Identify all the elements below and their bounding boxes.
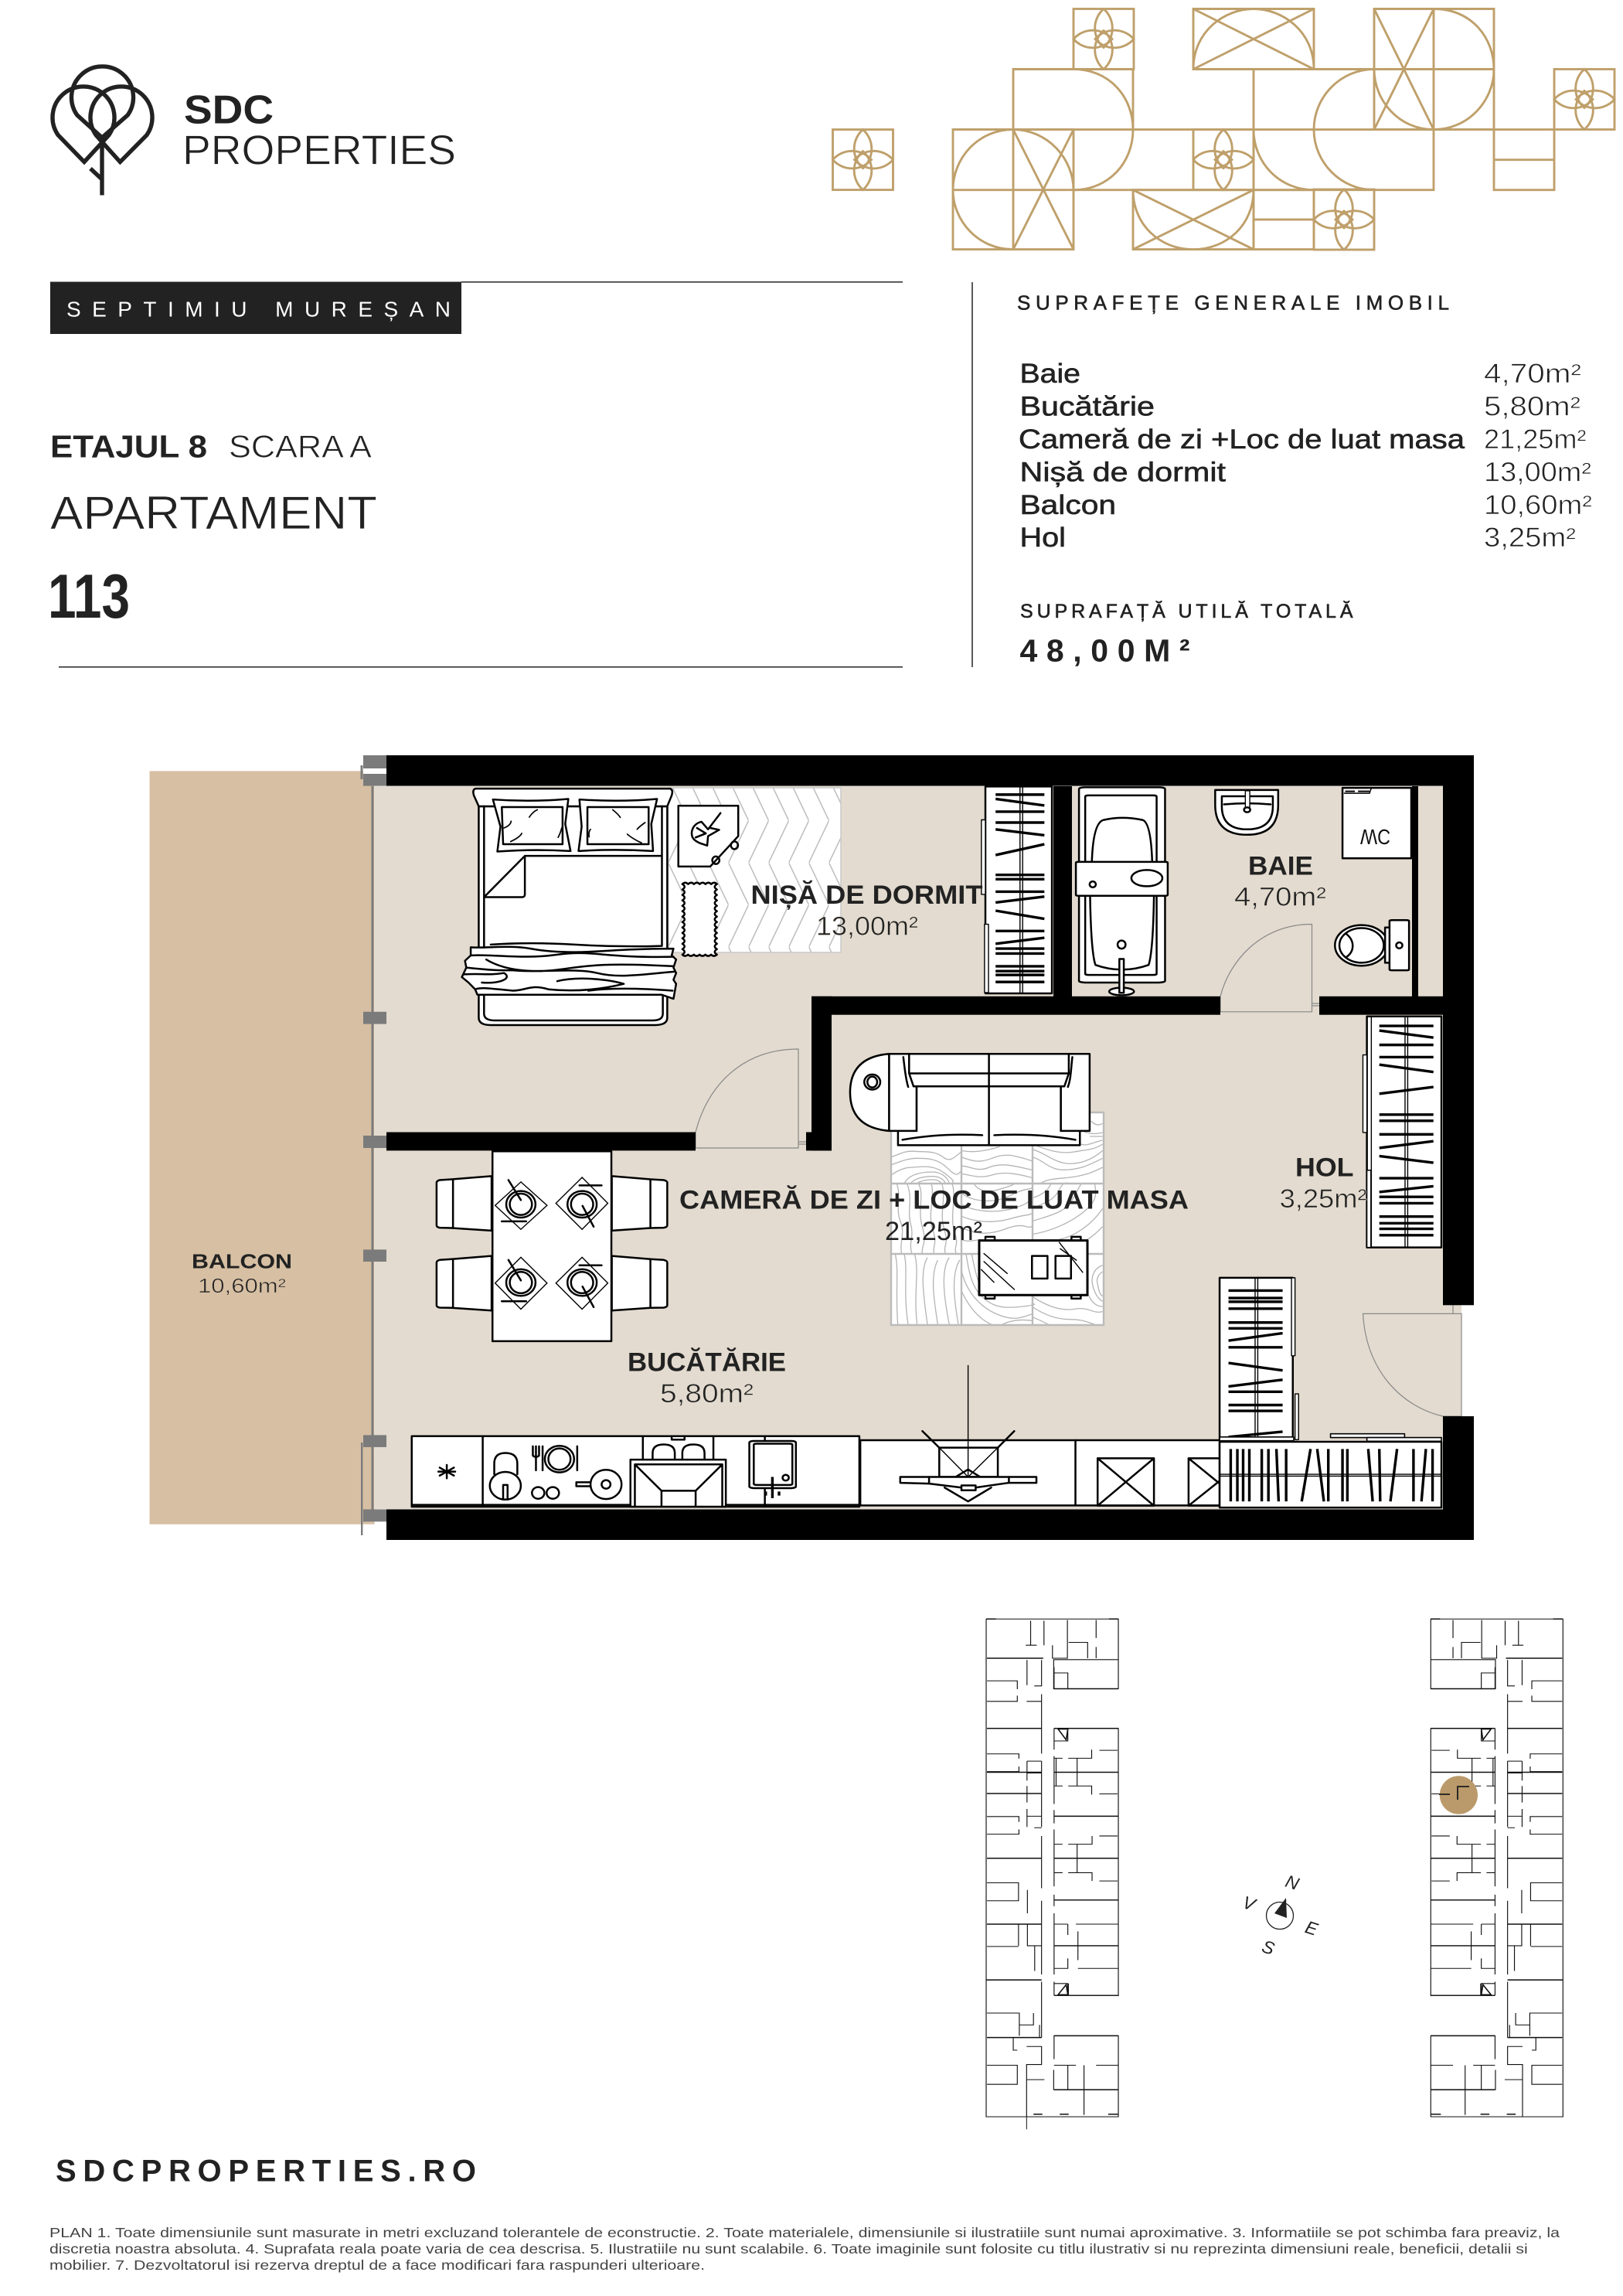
- header rule lines: [59, 281, 973, 668]
- label: sleeping niche: NIȘĂ DE DORMIT: [751, 881, 983, 910]
- icon: bedside mat: [682, 883, 717, 956]
- compass: S: [1260, 1936, 1278, 1959]
- label: bathroom: BAIE: [1248, 852, 1313, 881]
- label: balcony: [192, 1249, 292, 1297]
- compass: E: [1303, 1916, 1321, 1940]
- furniture: coffee table, tv unit, wardrobes: [860, 1156, 1441, 1507]
- room names and areas: [1019, 359, 1592, 553]
- compass: V: [1240, 1892, 1260, 1916]
- balcony glazing columns: [360, 755, 386, 1535]
- room names and areas: 21,25m²: [1484, 424, 1586, 455]
- floor plan: [150, 755, 1474, 1540]
- label: kitchen: [628, 1347, 786, 1409]
- icon: bottom wardrobe: [1220, 1442, 1441, 1507]
- label: balcony: BALCON: [192, 1249, 292, 1272]
- icon: hall wardrobe lower fittings: [1367, 1156, 1434, 1248]
- icon: dining table with chairs: [437, 1151, 667, 1341]
- label: mirrored WC mark: WC: [1360, 825, 1390, 849]
- decorative gold geometric pattern: [833, 9, 1614, 250]
- balcony area: [150, 771, 374, 1524]
- floor and scale heading: [50, 428, 373, 464]
- icon: hall wardrobe: [1363, 1017, 1441, 1248]
- label: bathroom: 4,70m²: [1234, 883, 1326, 912]
- total usable surface: SUPRAFAȚĂ UTILĂ TOTALĂ: [1020, 600, 1353, 622]
- room names and areas: Bucătărie: [1020, 391, 1155, 421]
- label: sleeping niche: 13,00m²: [816, 912, 918, 942]
- icon: kitchen sink: [750, 1441, 796, 1498]
- icon: toilet: [1335, 920, 1409, 970]
- icon: bathtub: [1076, 787, 1168, 995]
- website: SDCPROPERTIES.RO: [56, 2154, 476, 2188]
- icon: sofa with side table: [850, 1054, 1090, 1145]
- label: kitchen: BUCĂTĂRIE: [628, 1347, 786, 1377]
- label: living room: 21,25m²: [885, 1217, 982, 1246]
- label: living room: CAMERĂ DE ZI + LOC DE LUAT MASA: [679, 1186, 1189, 1215]
- apartment title: [48, 487, 377, 632]
- label: hall: HOL: [1295, 1153, 1354, 1182]
- legal disclaimer: discretia noastra absoluta. 4. Suprafata reala poate varia de cea descrisa. 5. Ilustratiile nu sunt scalabile. 6. Toate imaginile sunt folosite cu titlu ilustrativ si nu reprezinta dimensiuni reale, beneficii, detalii si: [49, 2241, 1528, 2257]
- walls: [386, 755, 1474, 1540]
- room names and areas: Baie: [1020, 359, 1080, 389]
- room names and areas: 4,70m²: [1484, 359, 1581, 389]
- icon: kitchen counter right with hob: [860, 1365, 1220, 1505]
- rug: herringbone: [669, 788, 841, 952]
- compass: N: [1283, 1871, 1301, 1894]
- room names and areas: 13,00m²: [1484, 457, 1591, 487]
- room names and areas: 3,25m²: [1484, 523, 1576, 553]
- compass: [1240, 1871, 1321, 1959]
- floor and scale heading: SCARA A: [229, 428, 373, 464]
- room names and areas: Hol: [1020, 523, 1066, 553]
- label: hall: [1280, 1153, 1367, 1214]
- marker: apartment position: [1440, 1776, 1478, 1814]
- total value: 48,00M²: [1020, 632, 1190, 668]
- icon: wardrobe niche: [982, 786, 1052, 993]
- logo wordmark SDC: SDC: [184, 88, 274, 133]
- doors: [696, 925, 1461, 1416]
- rug: wood grain: [891, 1112, 1104, 1325]
- apartment title: APARTAMENT: [50, 487, 377, 539]
- key plan: left building: [986, 1619, 1118, 2129]
- room names and areas: Cameră de zi +Loc de luat masa: [1019, 424, 1465, 455]
- furniture: wardrobe, bath, washbasin, toilet, sofa: [850, 786, 1441, 1248]
- icon: tree of three leaves: [53, 66, 152, 196]
- icon: bed: [462, 789, 676, 1025]
- label: balcony: 10,60m²: [198, 1274, 286, 1297]
- icon: washing machine box: [1342, 788, 1411, 858]
- legal disclaimer: PLAN 1. Toate dimensiunile sunt masurate in metri excluzand tolerantele de econstructie. 2. Toate materialele, dimensiunile si ilustratiile sunt numai aproximative. 3. Informatiile se pot schimba fara preaviz, la: [49, 2225, 1560, 2240]
- label: bathroom: [1234, 852, 1326, 912]
- icon: kitchen counter, fridge: [412, 1436, 859, 1507]
- address banner: Septimiu Muresan: [50, 281, 461, 334]
- icon: entry wardrobe: [1220, 1278, 1441, 1441]
- icon: washbasin: [1215, 790, 1278, 835]
- apartment title: 113: [48, 562, 130, 632]
- floor and scale heading: ETAJUL 8: [50, 428, 207, 464]
- icon: nightstand with plant: [679, 806, 738, 867]
- logo: SDC Properties: [53, 66, 456, 196]
- label: kitchen: 5,80m²: [660, 1379, 754, 1409]
- key plan: right building with apartment marker: [1431, 1619, 1563, 2117]
- label: sleeping niche: [751, 881, 983, 942]
- address banner: Septimiu Muresan: SEPTIMIU MUREȘAN: [66, 297, 451, 321]
- icon: cabinets with crosses: [1097, 1458, 1220, 1506]
- icon: coffee table: [979, 1237, 1087, 1299]
- interior floor: [375, 786, 1461, 1509]
- heading: surfaces: SUPRAFEȚE GENERALE IMOBIL: [1017, 291, 1449, 315]
- legal disclaimer: [49, 2225, 1560, 2273]
- logo wordmark PROPERTIES: PROPERTIES: [182, 127, 456, 173]
- furniture: dining table and kitchen left: [412, 1151, 859, 1507]
- room names and areas: Balcon: [1020, 490, 1116, 520]
- furniture: bedroom: [462, 789, 738, 1025]
- legal disclaimer: mobilier. 7. Dezvoltatorul isi rezerva dreptul de a face modificari fara raspunderi ulterioare.: [49, 2257, 705, 2273]
- icon: cooktop and oven: [631, 1436, 726, 1507]
- room names and areas: 10,60m²: [1484, 490, 1592, 520]
- icon: cookware: [490, 1446, 621, 1500]
- label: hall: 3,25m²: [1280, 1184, 1367, 1214]
- room names and areas: 5,80m²: [1484, 391, 1580, 421]
- panel: general surface list: [1017, 291, 1592, 668]
- compass needle: [1274, 1898, 1287, 1918]
- label: living room: [679, 1186, 1189, 1246]
- room names and areas: Nișă de dormit: [1020, 457, 1226, 487]
